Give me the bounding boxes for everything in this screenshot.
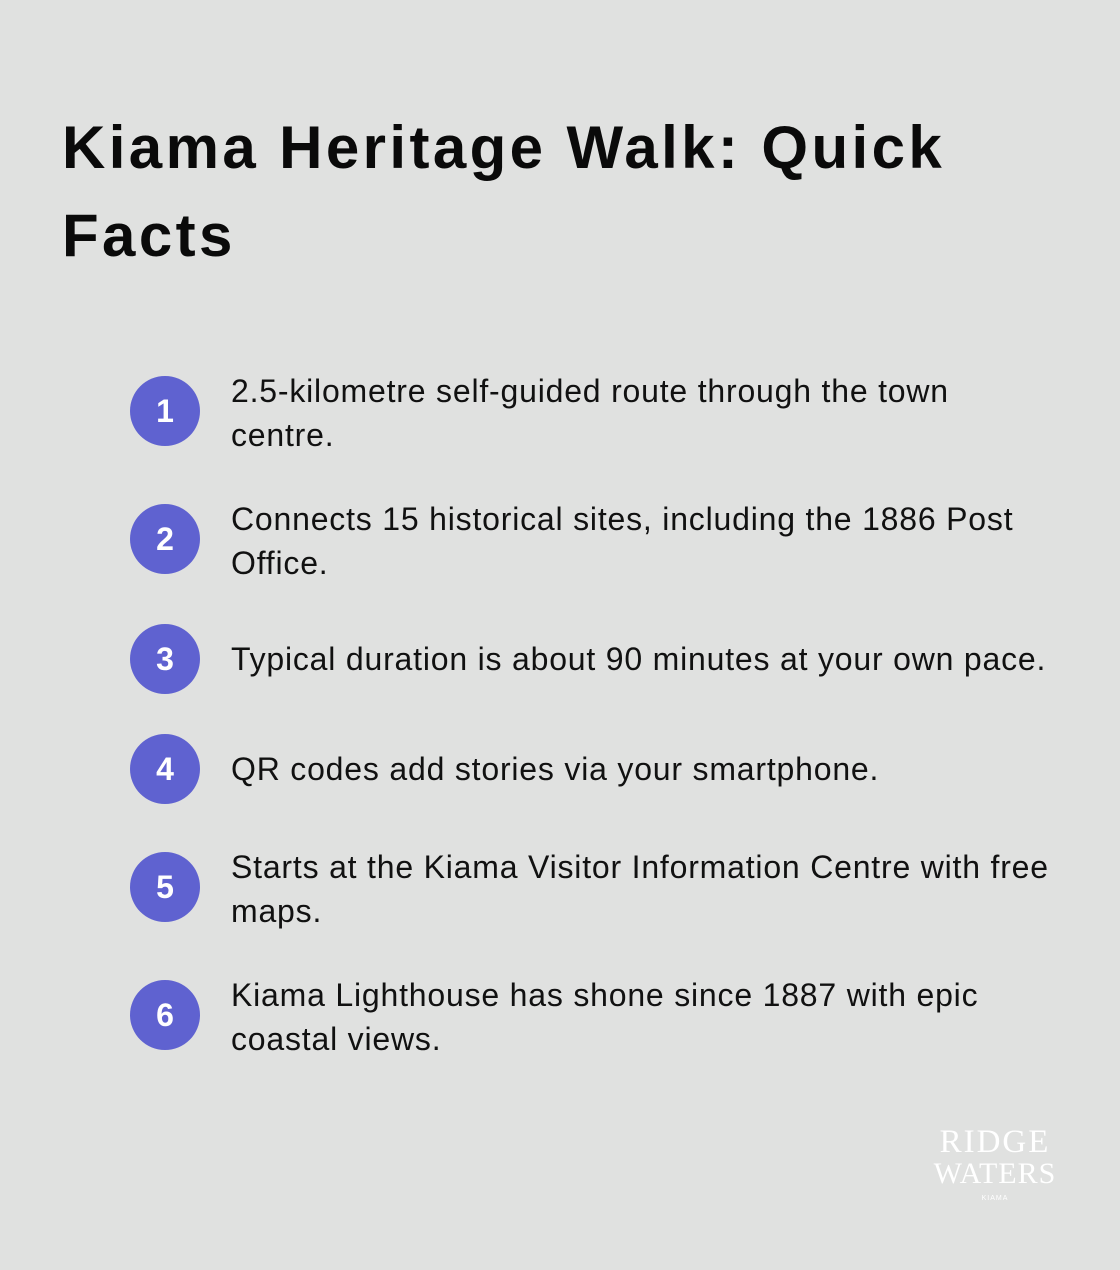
logo: KIAMA [982,1195,1008,1202]
logo: WATERS [934,1157,1056,1190]
title [62,114,945,269]
item 3: 3 [156,641,174,677]
item 4: 4 [156,751,174,787]
item 2 [130,501,1013,581]
item 6 [130,977,978,1057]
item 2: Office. [231,545,328,581]
item 2: Connects 15 historical sites, including the 1886 Post [231,501,1013,537]
item 5: Starts at the Kiama Visitor Information Centre with free [231,849,1049,885]
item 1 [130,373,949,453]
item 2: 2 [156,521,174,557]
item 6: 6 [156,997,174,1033]
item 6: Kiama Lighthouse has shone since 1887 with epic [231,977,978,1013]
item 3 [130,624,1046,694]
title: Facts [62,202,236,269]
item 1: 2.5-kilometre self-guided route through the town [231,373,949,409]
item 5 [130,849,1049,929]
item 6: coastal views. [231,1021,441,1057]
item 5: 5 [156,869,174,905]
item 1: centre. [231,417,334,453]
item 5: maps. [231,893,322,929]
item 1: 1 [156,393,174,429]
logo: RIDGE [940,1124,1050,1160]
item 3: Typical duration is about 90 minutes at your own pace. [231,641,1046,677]
item 4 [130,734,879,804]
title: Kiama Heritage Walk: Quick [62,114,945,181]
item 4: QR codes add stories via your smartphone. [231,751,879,787]
logo [934,1124,1056,1202]
